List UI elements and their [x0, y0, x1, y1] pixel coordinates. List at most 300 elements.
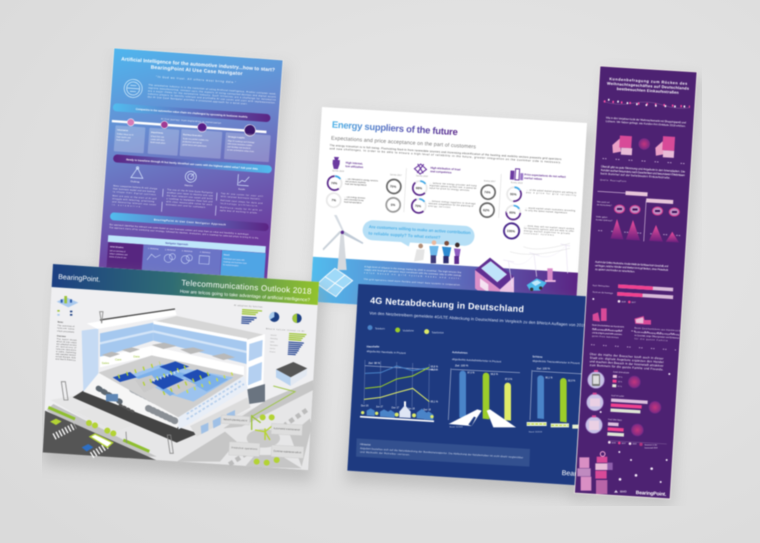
line chart: households: Dez 16	[361, 405, 369, 407]
AI card text: Build small pilots	[150, 141, 165, 145]
AI three column text: Many companies believe AI will change	[113, 184, 158, 190]
purple paragraph four	[590, 352, 664, 372]
callout text	[223, 418, 302, 454]
AI bottom workshop panel: roadmap and business case	[223, 260, 247, 265]
AI card text: Check first use	[151, 135, 165, 139]
BearingPoint logo: BearingPoint.	[58, 274, 100, 284]
energy column two	[408, 163, 497, 220]
AI three column text: with related business benefit.	[221, 195, 261, 201]
band: AI heading two	[113, 154, 272, 173]
bar chart: rail: abgedeckte Trassenkilometer in Prozent	[532, 359, 580, 365]
AI timeline	[111, 114, 267, 137]
ground level equipment and people	[98, 388, 177, 422]
building base	[73, 391, 198, 443]
gift stacks	[593, 308, 651, 325]
left glass tower	[82, 328, 98, 392]
energy title: Energy suppliers of the future	[332, 119, 458, 137]
purple paragraph two: Kunden suchen besonders nach Geschenken und besonderen Erlebnissen	[601, 168, 685, 177]
BearingPoint logo: BearingPoint.	[562, 470, 604, 479]
mini bars: 24 %	[618, 376, 623, 379]
pie charts	[269, 312, 302, 323]
light pavement block	[77, 407, 133, 432]
energy column two: 62%	[483, 208, 490, 212]
AI column dividers	[162, 189, 217, 216]
energy column one	[323, 156, 403, 212]
energy column three: energy market expertise to private	[524, 229, 571, 235]
string of lights	[603, 99, 690, 109]
entrance	[247, 384, 265, 404]
energy column three: to only the latest market regulations	[525, 209, 567, 214]
AI card text: Information	[117, 128, 129, 132]
booth labels: Sales	[102, 361, 110, 365]
white band	[153, 321, 247, 342]
4G notes box: Hinweise	[360, 442, 371, 447]
purple paragraph four: Über die Hälfte der Besucher kauft auch in dieser	[590, 352, 664, 361]
energy column one: 7%	[331, 198, 336, 202]
right chart labels: Service	[270, 348, 275, 350]
bus and cars	[50, 419, 113, 451]
energy band bullets	[364, 265, 462, 287]
bar chart: rail: 92,0 %	[568, 381, 575, 383]
telecom left notes: all operations of	[56, 345, 77, 349]
purple legend bottom	[608, 441, 667, 449]
overhead wires above band	[510, 243, 570, 254]
4G notes box: und Methodik der Betreiber variieren.	[360, 451, 410, 457]
energy column one: and products explicitly	[345, 180, 367, 184]
purple paragraph two	[600, 164, 686, 187]
AI bottom workshop panel: 4. Workshop	[200, 251, 210, 254]
AI three column text: Objective	[184, 184, 194, 187]
mini bars	[607, 370, 649, 438]
gift stack captions: Online und stationär im Handel vergleichen	[592, 328, 623, 333]
AI three column text	[112, 179, 264, 217]
callout text: Automated maintenance	[273, 427, 301, 432]
AI card text	[116, 127, 255, 153]
office blue base	[130, 364, 233, 402]
partner logos: BHO	[620, 490, 627, 494]
telecom left notes: The report shows	[57, 338, 77, 342]
mini bars: Anteil Onlinekäufe	[613, 370, 630, 375]
dotted legends	[592, 158, 687, 334]
right chart: use case bars	[233, 304, 262, 325]
wind turbine	[323, 215, 363, 270]
horizontal bars	[593, 284, 673, 299]
telecom left notes: chain processes	[57, 331, 74, 334]
poster: Christmas survey purple	[575, 66, 697, 499]
energy column three: ... would market smart customers according	[525, 206, 576, 213]
AI poster title: BearingPoint AI Use Case Navigator	[150, 65, 243, 77]
AI approach paragraph: Our approach identifies the relevant use cases based on your business context and rates them on value and feasibility in workshops.	[109, 223, 250, 236]
bar chart: motorways: abgedeckte Autobahnkilometer in Prozent	[452, 357, 502, 364]
partner logos	[614, 490, 627, 494]
booth roofs	[102, 343, 235, 360]
line chart: households: Haushalte	[367, 345, 380, 349]
energy column three: customer systems	[524, 232, 554, 237]
line chart: households: 95,8 %	[431, 366, 438, 368]
gift stack captions: Kunden erwarten Beratung, Beratung und gute Stimmung	[634, 331, 680, 336]
energy gradient band	[310, 257, 578, 318]
AI intro paragraph: Our AI Use Case Navigator provides a structured approach for a quick start.	[148, 96, 248, 106]
4G legend: Vodafone	[403, 329, 414, 333]
purple paragraph four: Stadt ein: digitale Angebote ergänzen den Handel	[590, 356, 664, 364]
AI three column text: in automotive.	[112, 203, 142, 208]
AI card text: with future business models	[227, 142, 252, 147]
right chart labels: Sales	[270, 341, 274, 344]
bar chart: motorways: 96,0 %	[491, 374, 498, 376]
small outbuilding	[276, 362, 307, 386]
4G notes box: Angaben beziehen sich auf die Netzabdeckung der Bundesnetzagentur. Die Abdeckung der Netzbetreiber ist nicht direkt vergleichbar	[360, 447, 523, 459]
4G legend: Telekom	[375, 327, 386, 331]
energy column three: Price expectations do not reflect	[524, 172, 566, 179]
energy column two: value-for-price for energy services	[429, 187, 469, 192]
hedges	[48, 407, 149, 451]
electric car and charger	[527, 268, 556, 291]
energy column two: 68%	[416, 186, 422, 190]
energy band bullets: value based on grid system needs and costs.	[364, 271, 461, 280]
purple paragraph three: wir fragen, welche Händler und Marken im Kopf bleiben, ohne Preisdruck	[595, 263, 669, 272]
poster: Energy suppliers of the future	[310, 107, 587, 318]
energy band bullets: The grid operators need more flexible and smart data systems in cooperation.	[364, 278, 461, 287]
white booths row	[100, 346, 152, 367]
right chart labels: Finance	[269, 351, 275, 354]
band: AI heading two: Ready to transform through AI but barely identified use cases with the highest added value? Ask your data	[126, 157, 259, 171]
gift boxes	[577, 452, 613, 494]
AI bottom workshop panel: Result	[224, 253, 230, 257]
AI card text: Scale successful models into	[183, 137, 209, 142]
AI bottom workshop panel: Prioritized use cases with	[223, 257, 245, 262]
purple legend bottom: 2018	[632, 444, 636, 446]
AI card text: Align AI roadmap and strategy	[228, 139, 255, 144]
4G notes box	[356, 438, 530, 467]
mini bars: Kauf über Apps	[608, 418, 622, 422]
4G legend: Telefónica	[432, 330, 444, 334]
callout text: Predictive operations	[231, 446, 258, 451]
AI three column text: Defined next steps for data and	[220, 199, 262, 205]
grey walkways	[135, 375, 197, 395]
line chart: households: Dez 17	[392, 407, 400, 409]
AI card text: cases with data	[151, 138, 165, 142]
purple poster title	[607, 76, 689, 95]
road	[43, 411, 156, 460]
energy column three: 100%	[507, 229, 515, 233]
glass mullions	[100, 331, 247, 352]
AI card text: business units	[116, 138, 129, 142]
gift stack captions: für die ganze Familie	[634, 337, 669, 342]
line chart: households: 95,7 %	[431, 370, 438, 372]
bar chart: rail	[527, 354, 590, 433]
energy intro text: The energy transition is in full swing. Fluctuating feed-in from renewable sources and increasing electrification of the heating and mobility sectors presents grid operators	[330, 143, 562, 161]
crosswalks	[54, 426, 107, 455]
bar chart: motorways: Stand: 11/2018	[449, 425, 464, 428]
AI three column text: struggle with selecting, prioritizing	[112, 197, 154, 203]
illustration: wind turbine, solar field, people, house	[317, 215, 570, 308]
band: AI heading one	[113, 103, 271, 122]
energy column one: Survey 2018	[332, 169, 345, 173]
purple paragraph three	[595, 260, 669, 273]
purple paragraph three: zu spüren und Kaufen zu verschieben.	[595, 267, 635, 273]
AI three column text: technology architecture.	[220, 202, 259, 208]
4G title: 4G Netzabdeckung in Deutschland	[370, 295, 524, 314]
AI intro paragraph: The automotive industry is in the transition of using Artificial Intelligence. Predict customer need,	[148, 84, 277, 96]
energy column divider	[404, 168, 501, 218]
energy column one: 5%	[391, 203, 396, 207]
four people	[414, 240, 461, 264]
energy column two: High attribution of trust	[430, 166, 461, 171]
purple poster left labels: Kunden Geld aus?	[596, 219, 613, 222]
legend mini chart	[57, 296, 78, 316]
grey roof	[155, 316, 265, 340]
energy column three: ... of the asked market players are willing to	[526, 188, 577, 195]
AI card text: Business Execution	[183, 133, 203, 138]
poster: AI use case navigator	[98, 48, 283, 279]
gift stack captions: im Geschäft, lange Öffnungszeiten und Erlebnisse	[634, 334, 680, 340]
telecom subtitle: How are telcos going to take advantage of artificial intelligence?	[180, 289, 311, 302]
purple legend bottom: 2016	[612, 442, 616, 444]
right glass tower	[247, 334, 265, 389]
telecom left notes: across Europe, Asia	[56, 355, 77, 359]
band: AI heading three: BearingPoint AI Use Case Navigator Approach	[154, 217, 226, 227]
4G subtitle: Von den Netzbetreibern gemeldete 4G/LTE Abdeckung in Deutschland im Vergleich zu den BNetzA Auflagen von 2019	[369, 310, 587, 328]
mid grey ground left	[47, 404, 157, 457]
purple paragraph two: beim Bummel auf der beliebtesten Einkaufsstraße.	[600, 171, 671, 180]
AI three column text: agile way of working in pilots.	[220, 209, 258, 215]
purple poster left labels: die Wunschliste?	[597, 203, 613, 207]
gift stack captions: Beste Geschenkideen aus Händlersicht	[634, 327, 681, 333]
bar chart: motorways: Ziel: 100 %	[455, 364, 469, 368]
energy column two: important options up their role: it cannot be	[429, 184, 477, 190]
mini bars: 41 %	[617, 386, 622, 388]
AI intro paragraph: improve manufacturing, connect cars; the aspects of using connected devices and digital assets	[148, 87, 277, 99]
AI four stage cards	[114, 124, 271, 162]
telecom left notes: which AI use cases	[56, 340, 77, 344]
telecom left notes: telecom operators	[56, 348, 76, 352]
energy column one: 70%	[390, 184, 396, 189]
AI intro paragraph: are a major theme for the automotive industry. Such initiatives are a challenge for automotive	[148, 90, 277, 102]
line chart: households	[361, 345, 438, 411]
right chart: large bars: Where telcos invest in AI	[266, 327, 305, 333]
bar chart: rail: Ziel: 100 %	[537, 366, 551, 370]
energy band bullets: A high level of reliance in the energy market by 2030 is essential. The high-tension line	[364, 265, 462, 274]
purple poster left labels: Wofür geben	[596, 216, 607, 219]
mini bars: 33 %	[618, 381, 622, 383]
purple paragraph one	[606, 116, 687, 128]
energy column three: 65%	[509, 210, 516, 215]
energy column one: low utilization	[345, 164, 364, 169]
AI bottom workshop panel: status of your AI use	[109, 255, 126, 259]
energy column two: 70%	[415, 204, 421, 208]
gift stack captions: Beste Geschenkideen aus Kundensicht	[592, 324, 624, 329]
energy column two: Survey 2018	[416, 174, 429, 178]
line chart: households: Jun 17	[376, 406, 384, 408]
AI bottom workshop panel: for implementation	[223, 263, 239, 267]
icon: challenge triangle	[131, 166, 144, 178]
power poles and wires	[503, 244, 570, 287]
AI bottom workshop panel: Navigator Approach	[165, 242, 189, 246]
poster: Telecommunications Outlook 2018	[42, 264, 319, 470]
bar chart: motorways: Autobahnen	[452, 350, 468, 355]
info callouts	[221, 415, 304, 458]
telecom left notes: and customer service	[56, 353, 77, 357]
AI intro paragraph	[148, 84, 277, 108]
AI bottom workshop panel: Get an overview of	[110, 249, 126, 253]
telecom left notes: The overview of	[57, 325, 75, 328]
entrance ledge	[190, 397, 251, 437]
right chart labels	[269, 334, 279, 354]
purple poster title: Weihnachtsgeschäftes auf Deutschlands	[607, 81, 689, 91]
purple legend bottom: 2017	[622, 443, 626, 445]
open ground level	[83, 372, 179, 428]
telecom left notes: in sales, marketing	[56, 350, 76, 354]
energy column one: ... are interested in energy services	[345, 178, 378, 183]
ornaments and cones	[610, 205, 679, 242]
grey road shapes right	[177, 380, 313, 468]
purple paragraph four: zum Bummeln für die ganze Familie und Freunde.	[590, 363, 664, 372]
telecom title: Telecommunications Outlook 2018	[181, 278, 312, 296]
callout text: Customer experience with AI	[273, 450, 302, 454]
AI three column text: and measuring relevant use cases	[112, 200, 156, 206]
energy column one: 74%	[331, 181, 338, 185]
telecom left notes: Overview	[57, 336, 66, 338]
AI card text: across automotive value chain	[227, 148, 254, 153]
telecom header band	[52, 264, 319, 305]
bar chart: rail: Stand: 11/2018	[529, 430, 543, 433]
right chart: use case bars: AI adoption by function	[234, 304, 262, 309]
line chart: households: 85,1 %	[431, 402, 438, 404]
AI three column text: Most are only at the start of AI and	[112, 194, 157, 200]
purple poster left labels: Was passt auf	[597, 200, 610, 204]
telecom left notes: are adopted across	[56, 343, 76, 347]
purple paragraph one: Lichtern. Wir haben gefragt, wie Kunden ihre Einkäufe 2018 erleben.	[606, 119, 686, 128]
energy column three: 50%	[510, 192, 517, 197]
energy column one: heat transportation	[344, 201, 362, 205]
AI card text: Collect ideas on AI	[117, 132, 134, 137]
energy column one: ... use energy services	[344, 196, 365, 200]
gift stack captions: guten Preis bekommen	[592, 335, 620, 339]
AI bottom workshop panel: today's ambitions and	[109, 252, 128, 256]
AI three column text: to shape their digital journeys.	[113, 190, 157, 196]
energy column two: Survey 2017	[484, 179, 497, 183]
snow dots	[592, 298, 670, 483]
house with solar roof	[475, 258, 514, 308]
telecom left notes: and North America	[55, 358, 76, 362]
purple lower content in screen coordinates	[577, 260, 681, 498]
purple poster left labels	[596, 200, 614, 222]
AI poster quote: "In God we trust. All others must bring data."	[156, 75, 236, 84]
icon: results chart	[238, 174, 249, 186]
light ground	[51, 382, 313, 470]
energy column three: for flexibility options and are able to offer	[524, 227, 574, 233]
main office floor	[98, 355, 244, 417]
energy column three: ... think they will not market smart system	[524, 224, 574, 230]
energy column three: market values	[524, 176, 543, 181]
bar chart: rail: 96,1 %	[545, 378, 553, 380]
booth labels: Data	[133, 354, 140, 358]
booth labels: Care	[115, 358, 122, 362]
office blue zones	[135, 367, 228, 396]
right gift stack icon	[655, 136, 675, 158]
AI timeline: AI first journey: from exploration to monetization	[161, 118, 222, 125]
AI bottom workshop panel: 2. Workshop	[165, 248, 176, 252]
AI three column text: a roadmap to implement them fast and	[166, 197, 212, 203]
bar chart: rail: Schiene	[532, 354, 543, 359]
line chart: households: abgedeckte Haushalte in Prozent	[367, 349, 406, 355]
energy column three	[502, 168, 578, 242]
speech bubble: to reliable supply? To what extent?	[368, 231, 441, 240]
green cable path	[252, 386, 295, 417]
AI three column text: the most relevant use cases and build	[167, 194, 213, 200]
energy column two: relevant competence for the planning of	[428, 202, 474, 208]
telecom illustration	[43, 296, 313, 470]
AI approach paragraph: The approach starts off by analyzing your strategy, followed by ideation, evaluation, and a roadmap for selected pilots to bring AI to life.	[109, 226, 259, 240]
line chart: households: Dez 18	[423, 409, 431, 411]
icon: objective gauge	[185, 171, 197, 183]
callout text: Network planning and AI	[223, 418, 248, 422]
communication towers	[61, 312, 173, 453]
AI three column text: Results	[238, 188, 245, 191]
icon: AI logo circle	[124, 79, 143, 98]
BearingPoint logo purple poster: BearingPoint.	[636, 490, 667, 498]
AI card text: and develop new products	[227, 145, 251, 150]
gift stack captions: und die richtige Auswahl treffen und einen	[592, 331, 623, 336]
bar legend	[618, 300, 636, 304]
front glass wall	[178, 376, 248, 429]
bar legend: 2018	[621, 301, 627, 303]
purple paragraph four: und machen den Besuch in der Innenstadt attraktiver	[590, 359, 664, 368]
purple poster title: bestbesuchten Einkaufsstraßen	[617, 86, 679, 95]
AI bottom workshop panel: 1. Workshop	[148, 247, 159, 251]
purple poster title: Kundenbefragung zum Rücken des	[609, 76, 687, 86]
band: AI heading three	[110, 212, 269, 231]
purple paragraph one: Wie in den Vorjahren lockt der Weihnachtsmarkt mit Shoppingspaß und	[606, 116, 687, 125]
dotted legend	[591, 345, 676, 350]
right chart labels: Network	[270, 334, 277, 337]
booth labels	[102, 354, 140, 365]
purple paragraph two: Überall gibt es gute Stimmung und Angebote in den Innenstädten. Die	[601, 164, 686, 174]
ornament icons	[586, 370, 604, 433]
line chart: households: Jun 18	[408, 408, 415, 410]
purple legend bottom: Gewinner in der	[644, 445, 658, 447]
energy column three: pay a price for grid reliability	[526, 191, 577, 197]
solar panels	[317, 268, 353, 297]
AI card text: from teams and	[117, 135, 131, 139]
energy column two: ... believe energy suppliers to leverage	[428, 200, 476, 205]
purple legend bottom: Innenstadt 2018	[644, 446, 657, 449]
AI card text: production and set up	[182, 140, 203, 145]
energy column two: ... believe the energy provider will keep	[430, 182, 477, 188]
mini bars: Kauf im Laden	[611, 395, 624, 398]
band: AI heading one: Companies in the automotive value chain are challenged by upcoming AI business models	[136, 107, 248, 119]
roof dark edge	[100, 309, 175, 320]
AI poster title: Artificial Intelligence for the automotive industry...how to start?	[121, 57, 275, 73]
AI three column text: enables your team to identify and rate	[167, 191, 214, 197]
AI card text: governance and operations	[182, 143, 207, 148]
energy column one: High interest,	[346, 161, 363, 166]
energy column three: Survey 2018	[511, 181, 523, 185]
AI three column text: their business model and are looking	[113, 187, 155, 193]
AI card text: Experiments	[151, 131, 164, 135]
energy intro text: and new challenges. In order to be able to ensure a high level of reliability in the future, greater integration on the customer side is necessary.	[329, 146, 561, 164]
AI three column text: business unit and for customers.	[166, 203, 206, 209]
central orb icon	[639, 138, 650, 150]
label tags	[595, 189, 674, 243]
AI three column text: Challenge	[130, 181, 140, 184]
AI three column text: Workforce ready for AI with an	[220, 206, 262, 212]
dark blue desk zones	[113, 361, 211, 389]
left gift stack icon	[612, 135, 633, 155]
percentage orbs	[628, 376, 661, 436]
telecom left notes: telecom value	[57, 327, 75, 331]
AI bottom workshop panel: Initial Situation	[110, 245, 124, 249]
